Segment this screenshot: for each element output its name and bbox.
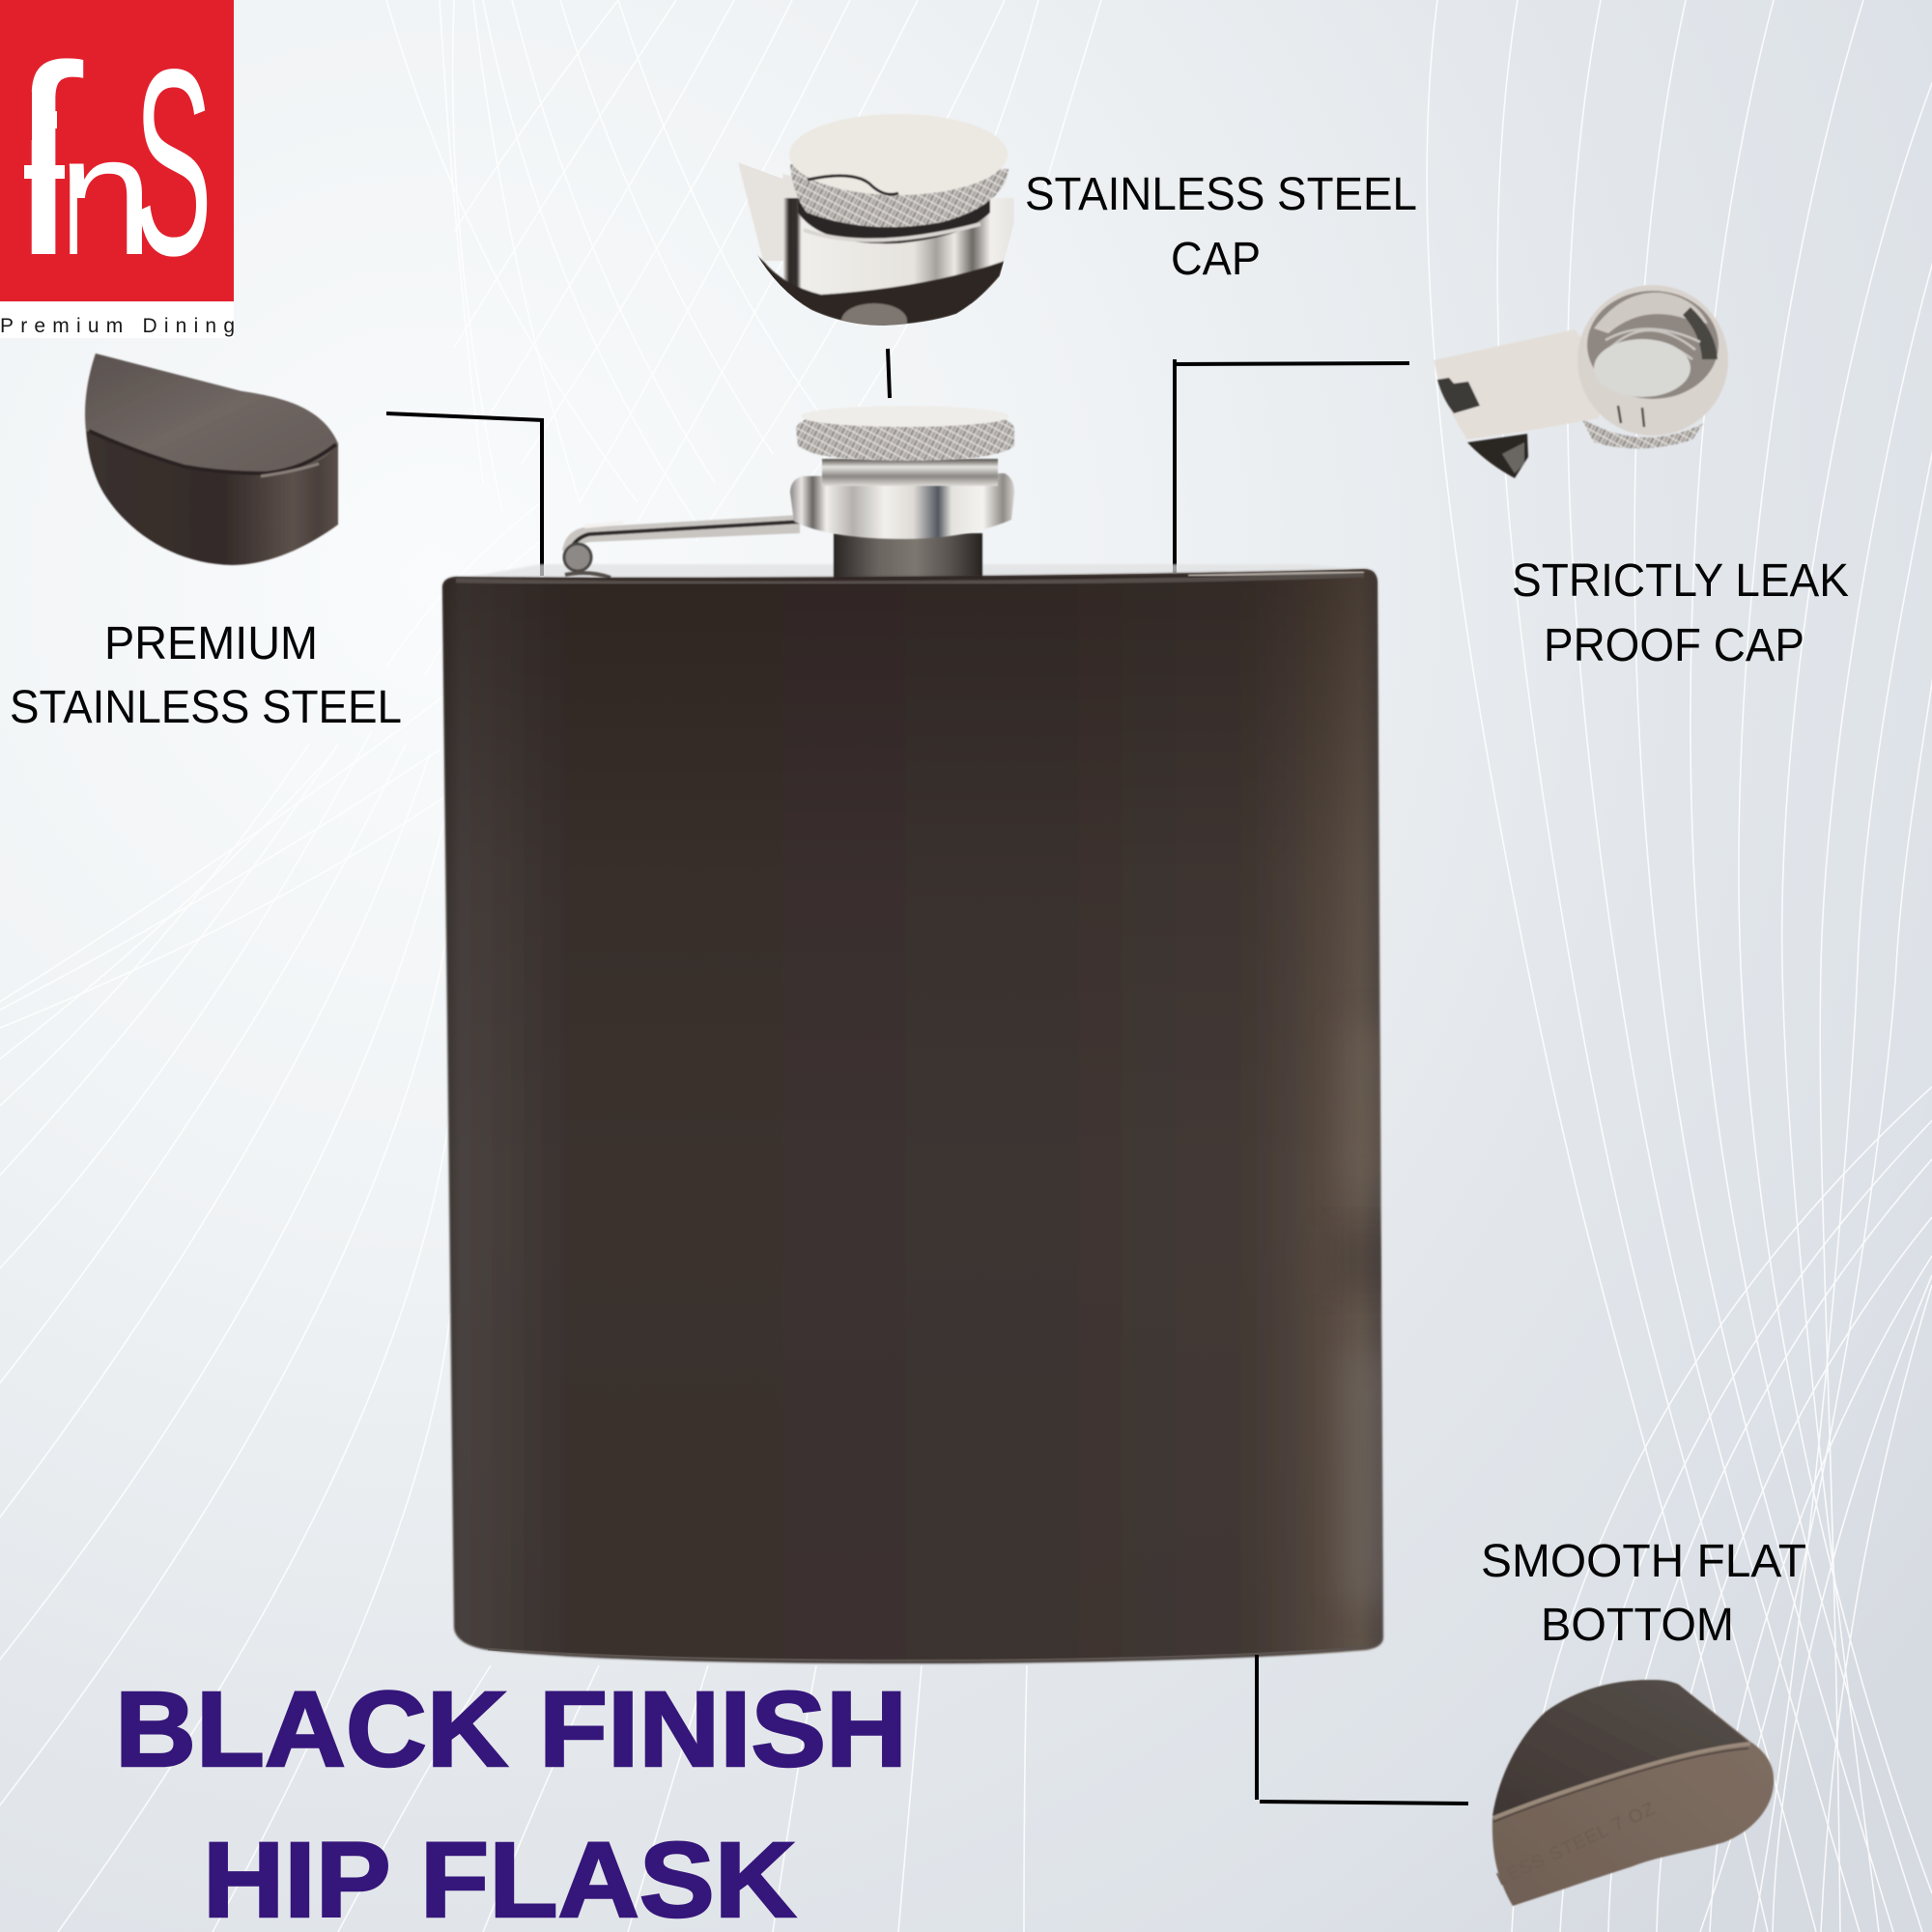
logo: fnS Premium Dining: f	[8, 11, 84, 312]
label: premium stainless steel	[10, 618, 402, 733]
callout line: steel	[386, 413, 544, 576]
logo: fnS Premium Dining: Premium Dining	[0, 315, 235, 337]
thumbnail: stainless steel cap close-up	[738, 114, 1014, 338]
label: strictly leak proof cap: STRICTLY LEAK	[1512, 555, 1849, 607]
label: smooth flat bottom: SMOOTH FLAT	[1481, 1536, 1806, 1587]
flask knurled cap	[796, 406, 1014, 461]
label: strictly leak proof cap: PROOF CAP	[1544, 620, 1804, 671]
callout line: leak proof cap	[1175, 359, 1409, 573]
flask collar	[790, 473, 1014, 539]
label: stainless steel cap: STAINLESS STEEL	[1025, 169, 1417, 220]
flask neck	[834, 533, 982, 582]
thumbnail: leak proof cap interior	[1434, 285, 1728, 478]
callout line: bottom	[1257, 1655, 1468, 1804]
logo: fnS Premium Dining: n	[58, 99, 153, 291]
label: stainless steel cap	[1025, 169, 1417, 285]
logo: fnS Premium Dining	[0, 0, 235, 338]
engraving: LESS STEEL 7 OZ	[1493, 1799, 1659, 1890]
flask inner neck	[822, 459, 998, 486]
thumbnail: premium stainless steel body corner	[85, 354, 338, 565]
label: premium stainless steel: STAINLESS STEEL	[10, 682, 402, 733]
label: stainless steel cap: CAP	[1171, 234, 1261, 285]
label: smooth flat bottom	[1481, 1536, 1806, 1651]
label: strictly leak proof cap	[1512, 555, 1849, 671]
title: black finish hip flask	[115, 1670, 907, 1932]
flask body	[442, 569, 1383, 1663]
callout line: cap	[888, 349, 890, 398]
flask hinge arm	[562, 515, 800, 578]
flask	[442, 406, 1401, 1663]
flask top surface glow	[454, 564, 1367, 580]
logo: fnS Premium Dining: S	[134, 15, 213, 312]
label: premium stainless steel: PREMIUM	[104, 618, 318, 669]
thumbnail: smooth flat bottom	[1492, 1680, 1774, 1906]
title: black finish hip flask: BLACK FINISH	[115, 1670, 907, 1789]
label: smooth flat bottom: BOTTOM	[1541, 1600, 1734, 1651]
